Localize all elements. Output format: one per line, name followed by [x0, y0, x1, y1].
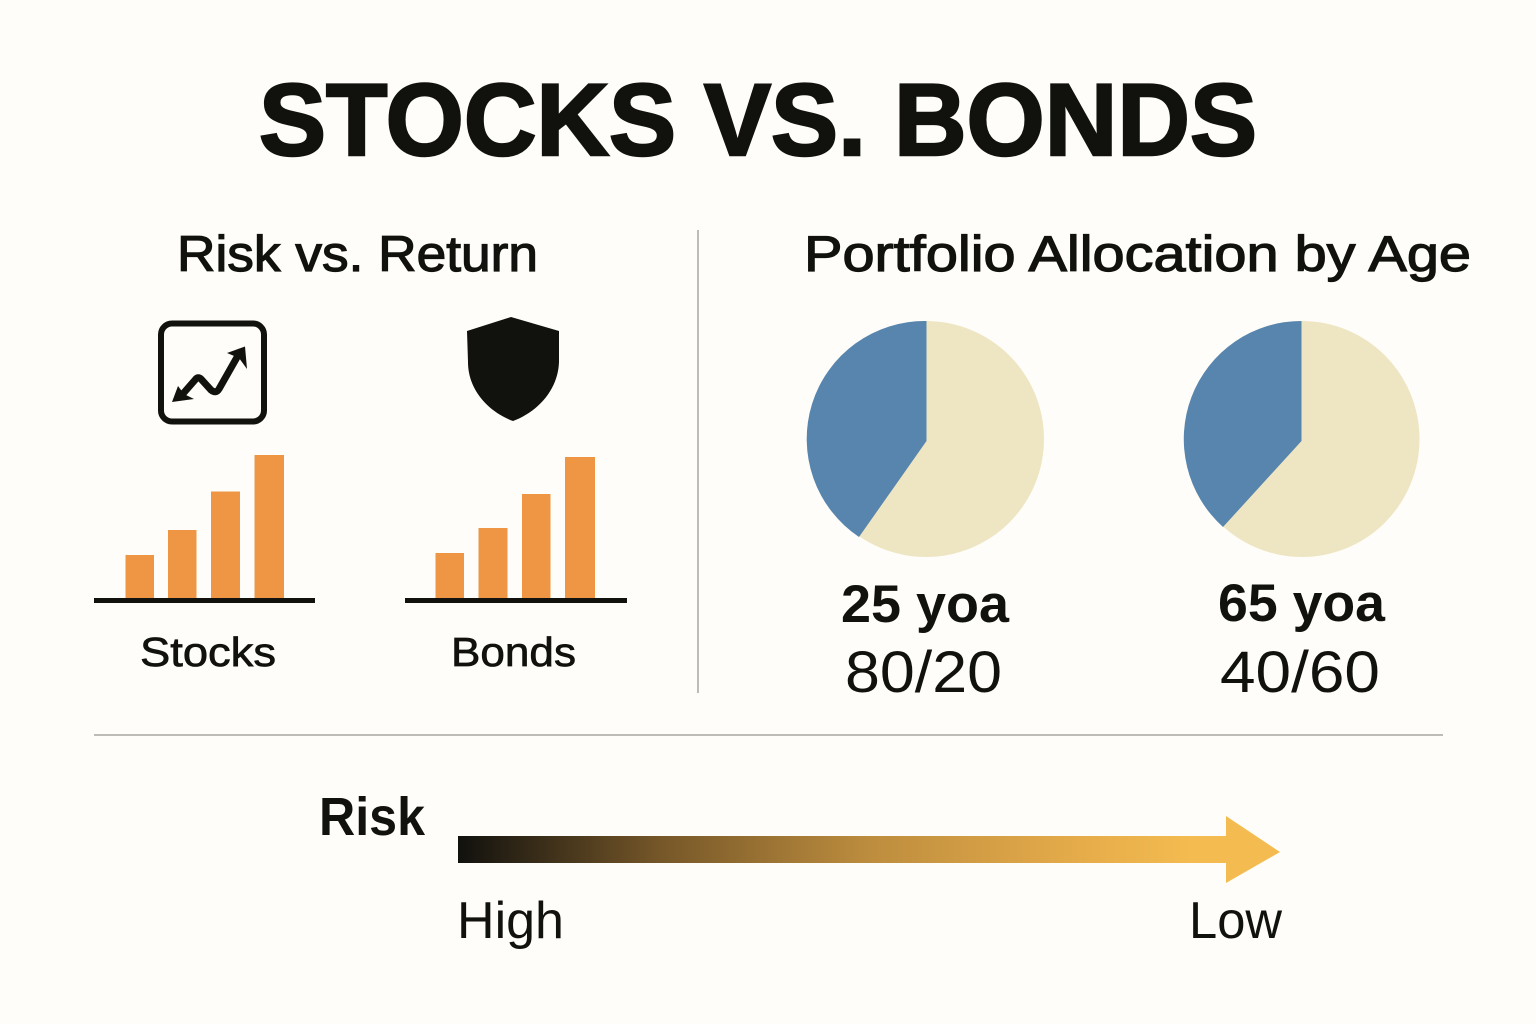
- label: stocks: Stocks: [140, 629, 276, 675]
- label: 65 yoa: 65 yoa: [1218, 574, 1386, 633]
- bar chart: bonds: [405, 457, 627, 603]
- panel: risk scale: [319, 787, 1282, 950]
- title: STOCKS VS. BONDS: [259, 63, 1257, 177]
- horizontal divider: [94, 734, 1443, 736]
- value: 40/60: 40/60: [1220, 640, 1380, 705]
- icon: bonds shield: [467, 317, 559, 421]
- pie chart: 65 yoa: [1184, 321, 1420, 557]
- icon: stocks chart: [161, 324, 264, 422]
- arrow: risk gradient: [458, 816, 1280, 883]
- label: risk: Risk: [319, 787, 426, 847]
- label: low: Low: [1189, 892, 1282, 950]
- heading: risk vs. return: Risk vs. Return: [177, 226, 538, 282]
- panel: risk vs. return: [94, 226, 627, 675]
- label: high: High: [457, 892, 564, 950]
- vertical divider: [697, 230, 699, 693]
- heading: portfolio allocation by age: Portfolio Allocation by Age: [804, 226, 1471, 282]
- label: 25 yoa: 25 yoa: [841, 575, 1010, 634]
- panel: portfolio allocation by age: [804, 226, 1471, 705]
- pie chart: 25 yoa: [807, 321, 1044, 557]
- value: 80/20: 80/20: [845, 640, 1002, 705]
- label: bonds: Bonds: [451, 629, 576, 675]
- bar chart: stocks: [94, 455, 315, 603]
